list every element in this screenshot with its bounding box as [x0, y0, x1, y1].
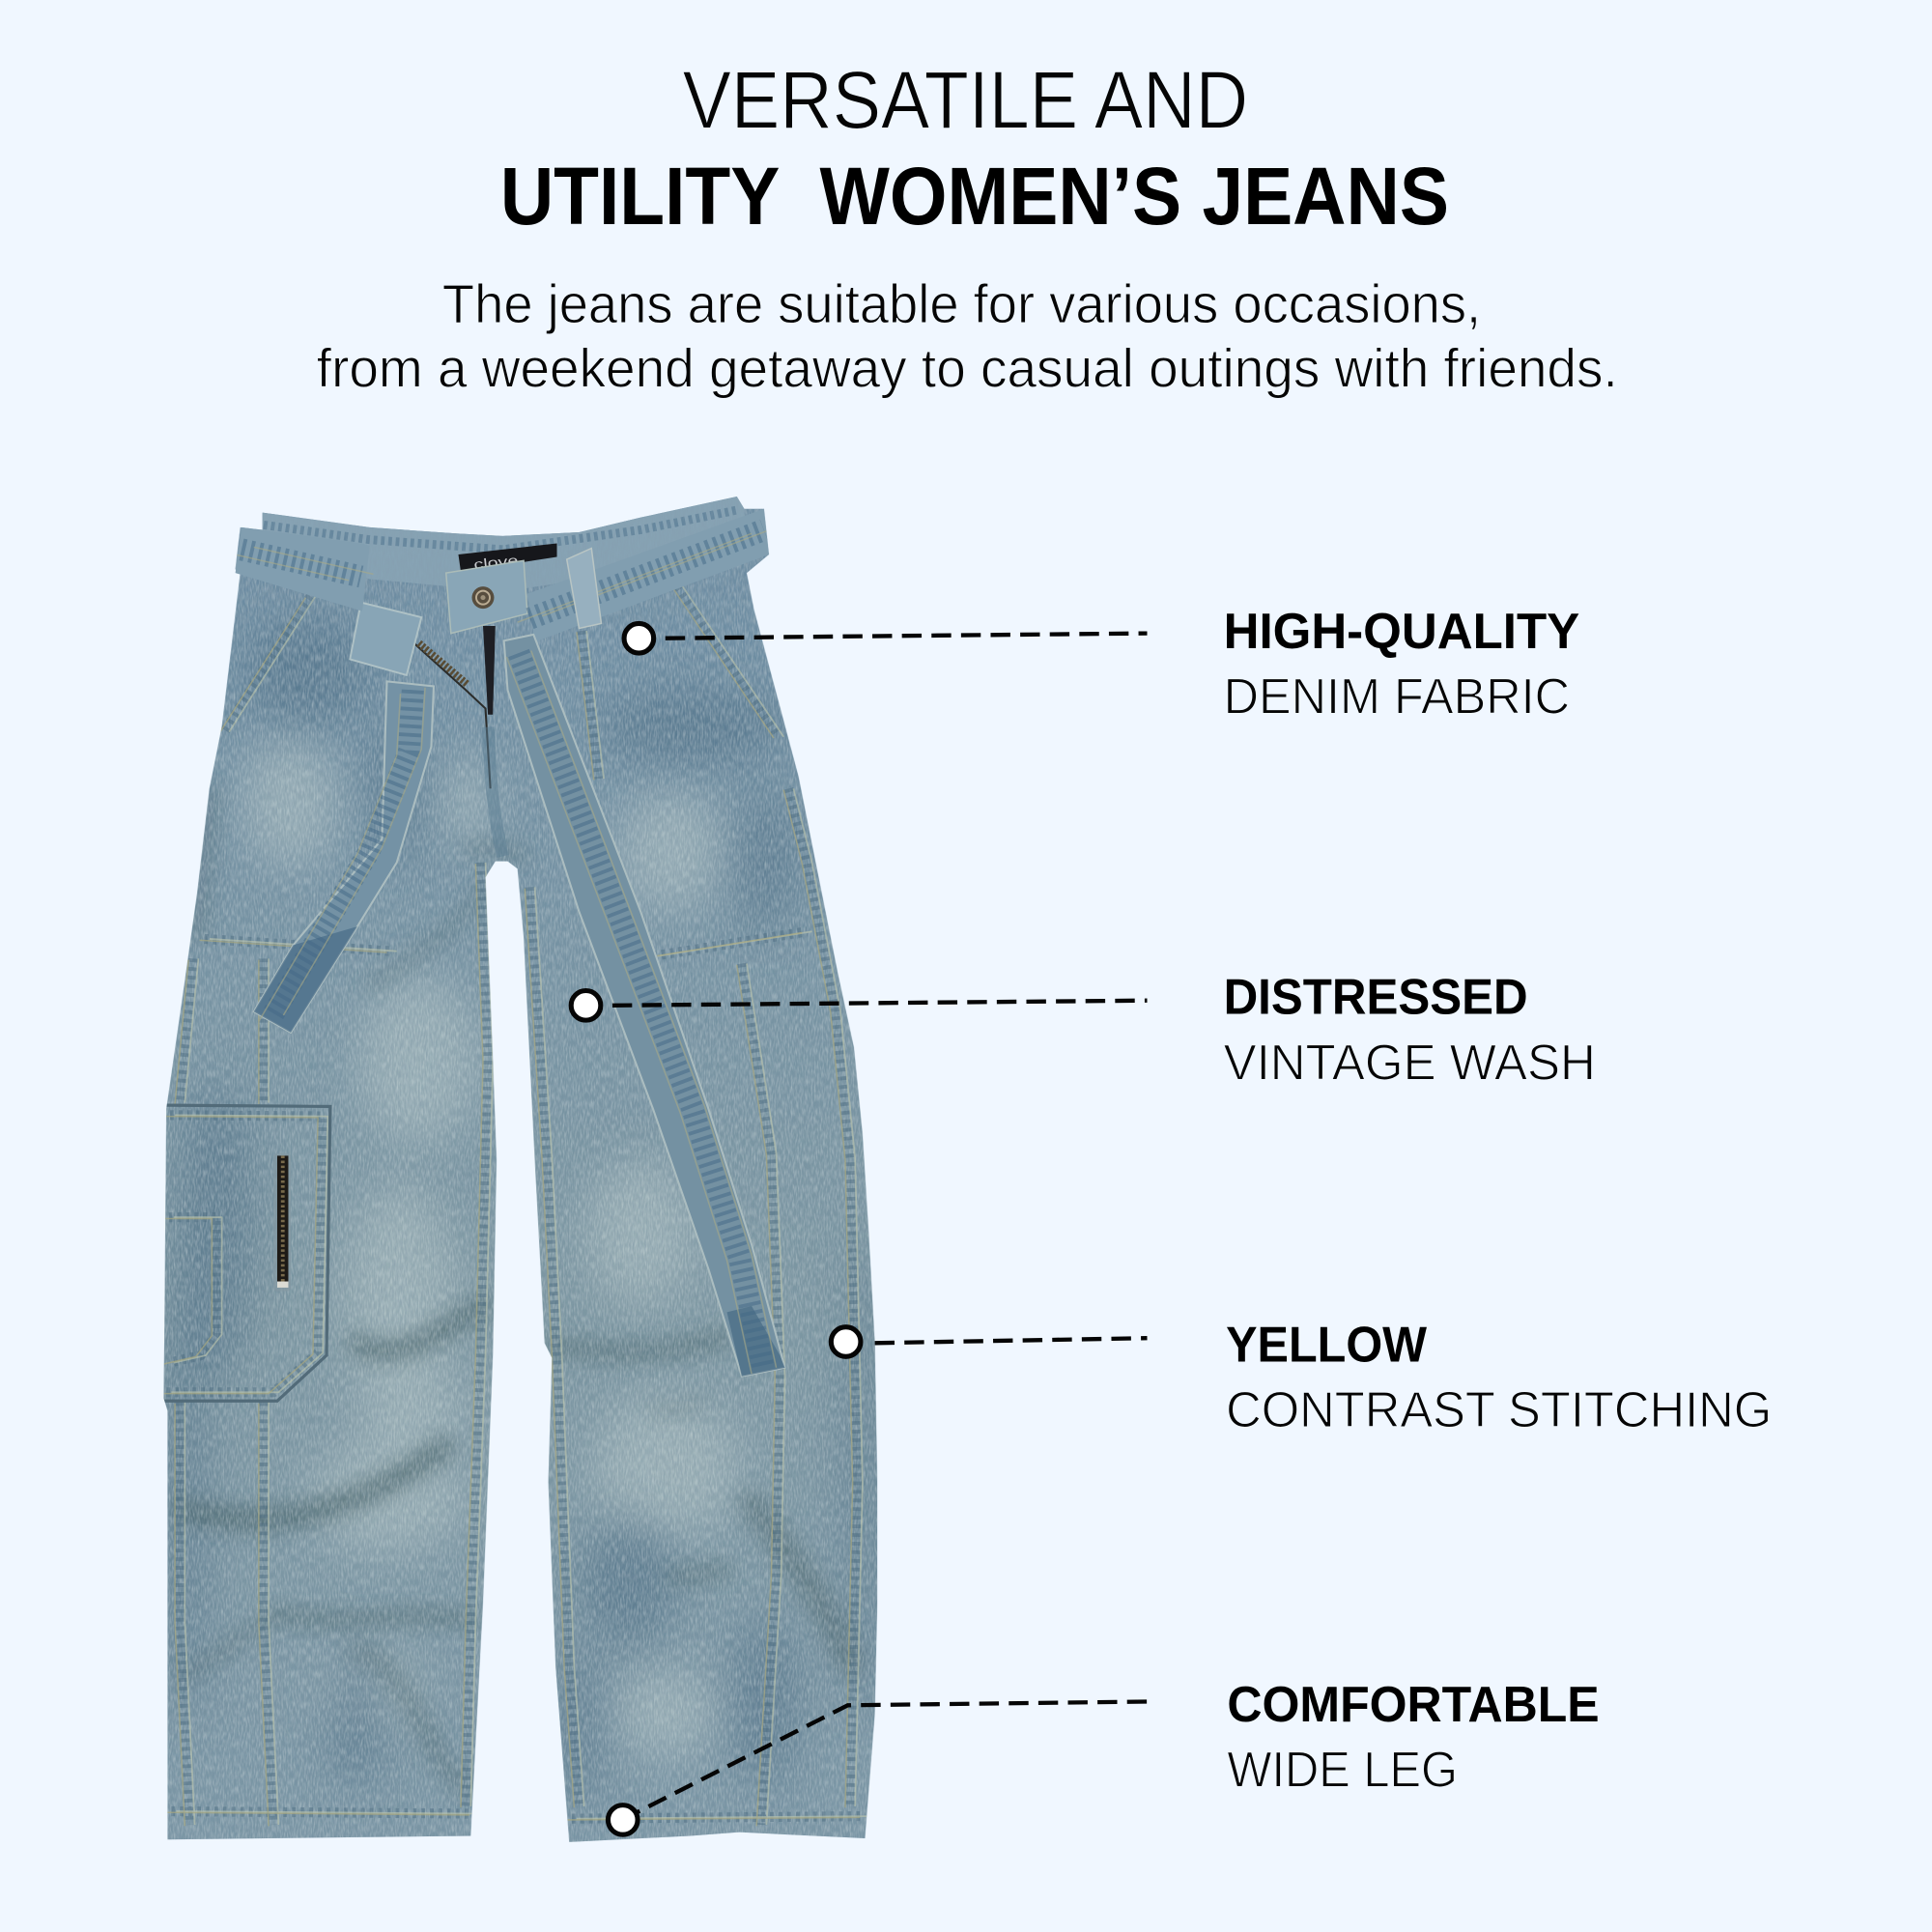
denim base: [148, 487, 899, 1855]
tie belt: [229, 509, 785, 1377]
marker: contrast stitching: [831, 1327, 861, 1356]
brand label: [458, 543, 557, 572]
label: high-quality denim fabric: DENIM FABRIC: [1224, 669, 1570, 725]
belt stitching: [229, 527, 777, 1374]
label: yellow contrast stitching: CONTRAST STITCHING: [1226, 1382, 1772, 1438]
marker: denim fabric: [624, 623, 654, 653]
metal button: [472, 586, 494, 609]
subtitle text: from a weekend getaway to casual outings with friends.: [317, 338, 1618, 399]
title: VERSATILE AND: [683, 55, 1248, 146]
belt right section: [527, 509, 769, 642]
belt short strap: [254, 681, 434, 1033]
leader: vintage wash: [612, 1001, 1148, 1006]
label: yellow contrast stitching: YELLOW: [1226, 1317, 1428, 1373]
leader: denim fabric: [666, 634, 1148, 639]
waistband: [259, 497, 744, 591]
title: UTILITY WOMEN’S JEANS: [500, 151, 1449, 242]
stitched seams: [161, 586, 870, 1826]
left waistband flap: [350, 603, 421, 675]
label: distressed vintage wash: DISTRESSED: [1224, 970, 1528, 1026]
label: distressed vintage wash: VINTAGE WASH: [1224, 1035, 1596, 1091]
marker: vintage wash: [571, 991, 601, 1020]
cargo zip: [273, 1153, 291, 1292]
right waistband panel: [446, 560, 527, 634]
belt end tips: [727, 1306, 784, 1377]
fly and zipper: [414, 626, 502, 856]
denim grain: [148, 487, 899, 1855]
marker: wide leg: [608, 1805, 638, 1834]
label: comfortable wide leg: [1227, 1677, 1600, 1798]
denim light and dark wash shading: [166, 616, 877, 1811]
label: comfortable wide leg: COMFORTABLE: [1227, 1677, 1600, 1733]
label: high-quality denim fabric: HIGH-QUALITY: [1224, 604, 1579, 660]
label: high-quality denim fabric: [1224, 604, 1579, 725]
leader: contrast stitching: [875, 1338, 1148, 1343]
callout leaders: [612, 634, 1148, 1820]
leader: wide leg: [622, 1701, 1148, 1820]
subtitle text: [317, 273, 1618, 399]
belt loop: [567, 549, 601, 629]
belt long strap: [504, 635, 784, 1377]
label: comfortable wide leg: WIDE LEG: [1227, 1742, 1458, 1798]
label: yellow contrast stitching: [1226, 1317, 1772, 1438]
callout markers: [571, 623, 861, 1834]
brand label: clove: [473, 553, 519, 572]
subtitle text: The jeans are suitable for various occasions,: [442, 273, 1481, 334]
title: [500, 55, 1449, 242]
label: distressed vintage wash: [1224, 970, 1596, 1091]
jeans illustration: [148, 487, 899, 1855]
belt left section: [236, 527, 370, 611]
cargo pocket edge: [164, 1105, 330, 1401]
